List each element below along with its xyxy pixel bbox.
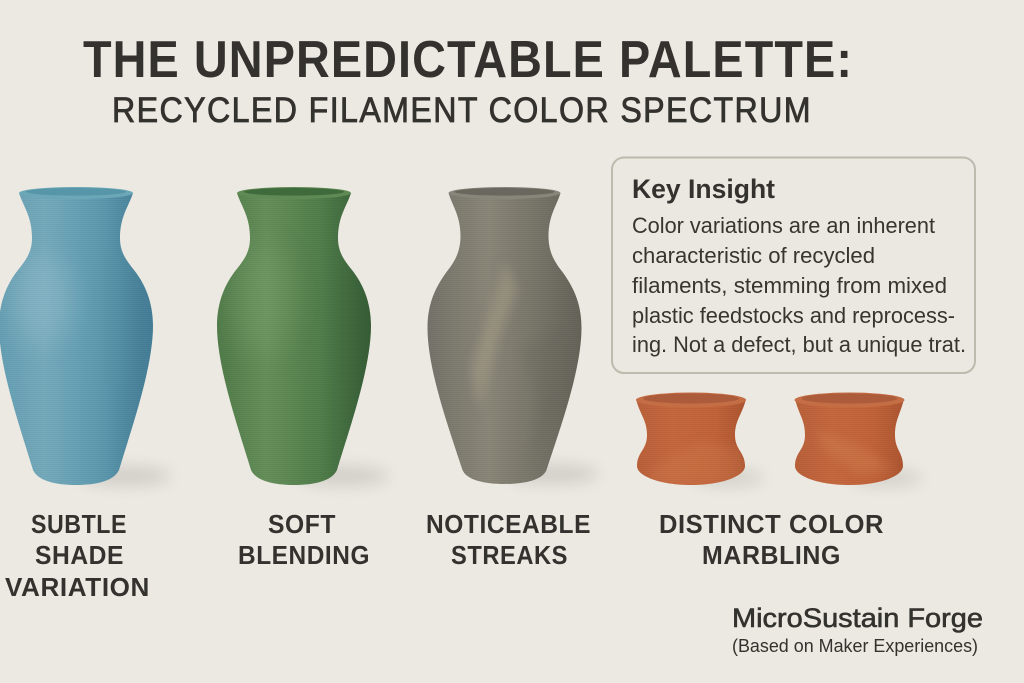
title: THE UNPREDICTABLE PALETTE:	[83, 31, 853, 89]
brand credit: (Based on Maker Experiences)	[732, 635, 978, 656]
subtitle: RECYCLED FILAMENT COLOR SPECTRUM	[112, 91, 812, 130]
panel: key insight	[612, 158, 975, 373]
label: subtle shade variation: SHADE	[35, 540, 124, 570]
key insight body text	[632, 213, 966, 357]
key insight body text: characteristic of recycled	[632, 243, 875, 268]
label: noticeable streaks: STREAKS	[451, 540, 568, 570]
label: distinct color marbling	[659, 509, 884, 570]
brand credit: MicroSustain Forge	[732, 603, 983, 633]
key insight body text: Color variations are an inherent	[632, 213, 936, 238]
label: noticeable streaks	[426, 509, 591, 570]
cup: terracotta right	[790, 390, 922, 490]
label: soft blending: BLENDING	[238, 540, 370, 570]
key insight body text: plastic feedstocks and reprocess-	[632, 303, 955, 328]
key insight body text: ing. Not a defect, but a unique trat.	[632, 332, 966, 357]
label: distinct color marbling: DISTINCT COLOR	[659, 509, 884, 539]
label: subtle shade variation	[5, 509, 150, 602]
label: soft blending	[238, 509, 370, 570]
vase: blue, subtle shade variation	[0, 185, 171, 490]
label: subtle shade variation: VARIATION	[5, 572, 150, 602]
label: subtle shade variation: SUBTLE	[31, 509, 127, 539]
vase: green, soft blending	[212, 185, 389, 490]
key insight heading: Key Insight	[632, 174, 775, 204]
key insight body text: filaments, stemming from mixed	[632, 273, 947, 298]
vase: grey, noticeable streaks	[422, 185, 599, 490]
cup: terracotta left	[636, 392, 760, 490]
label: distinct color marbling: MARBLING	[702, 540, 841, 570]
label: soft blending: SOFT	[268, 509, 336, 539]
brand credit	[732, 603, 983, 656]
label: noticeable streaks: NOTICEABLE	[426, 509, 591, 539]
